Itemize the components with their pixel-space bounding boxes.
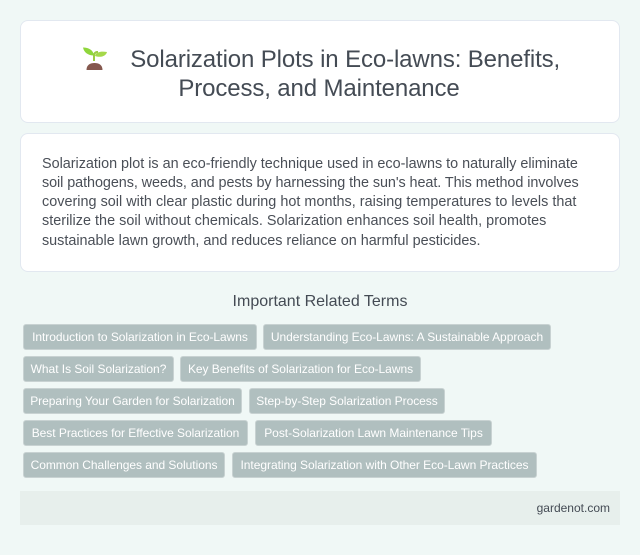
description text: soil pathogens, weeds, and pests by harnessing the sun's heat. This method involves [42, 175, 579, 191]
tag: Post-Solarization Lawn Maintenance Tips [264, 426, 483, 440]
tag: Key Benefits of Solarization for Eco-Lawns [188, 362, 413, 376]
footer source: gardenot.com [537, 501, 610, 515]
tag: Introduction to Solarization in Eco-Lawns [32, 330, 248, 344]
tag: Understanding Eco-Lawns: A Sustainable Approach [271, 330, 543, 344]
panel: header [20, 20, 620, 123]
tag: Best Practices for Effective Solarization [32, 426, 239, 440]
title: Process, and Maintenance [178, 75, 460, 102]
tag: Integrating Solarization with Other Eco-Lawn Practices [240, 458, 528, 472]
description text: sustainable lawn growth, and reduces reliance on harmful pesticides. [42, 233, 480, 249]
tag: Step-by-Step Solarization Process [256, 394, 438, 408]
tag [180, 356, 421, 382]
tag [23, 324, 257, 350]
footer [20, 491, 620, 525]
description text [42, 156, 579, 249]
description text: sterilize the soil without chemicals. Solarization enhances soil health, promotes [42, 213, 546, 229]
tag: Preparing Your Garden for Solarization [30, 394, 235, 408]
title [130, 46, 560, 102]
tag [249, 388, 445, 414]
tag [255, 420, 492, 446]
icon: seedling [83, 48, 107, 70]
description text: covering soil with clear plastic during hot months, raising temperatures to levels that [42, 194, 576, 210]
tag: What Is Soil Solarization? [31, 362, 166, 376]
tag [23, 356, 174, 382]
tag [23, 452, 225, 478]
tag [23, 388, 242, 414]
heading: related terms: Important Related Terms [233, 293, 407, 310]
tag [23, 420, 248, 446]
tag list [23, 324, 551, 478]
tag [263, 324, 551, 350]
tag [232, 452, 537, 478]
tag: Common Challenges and Solutions [31, 458, 217, 472]
panel: description [20, 133, 620, 272]
description text: Solarization plot is an eco-friendly technique used in eco-lawns to naturally eliminate [42, 156, 578, 172]
title: Solarization Plots in Eco-lawns: Benefits, [130, 46, 560, 73]
